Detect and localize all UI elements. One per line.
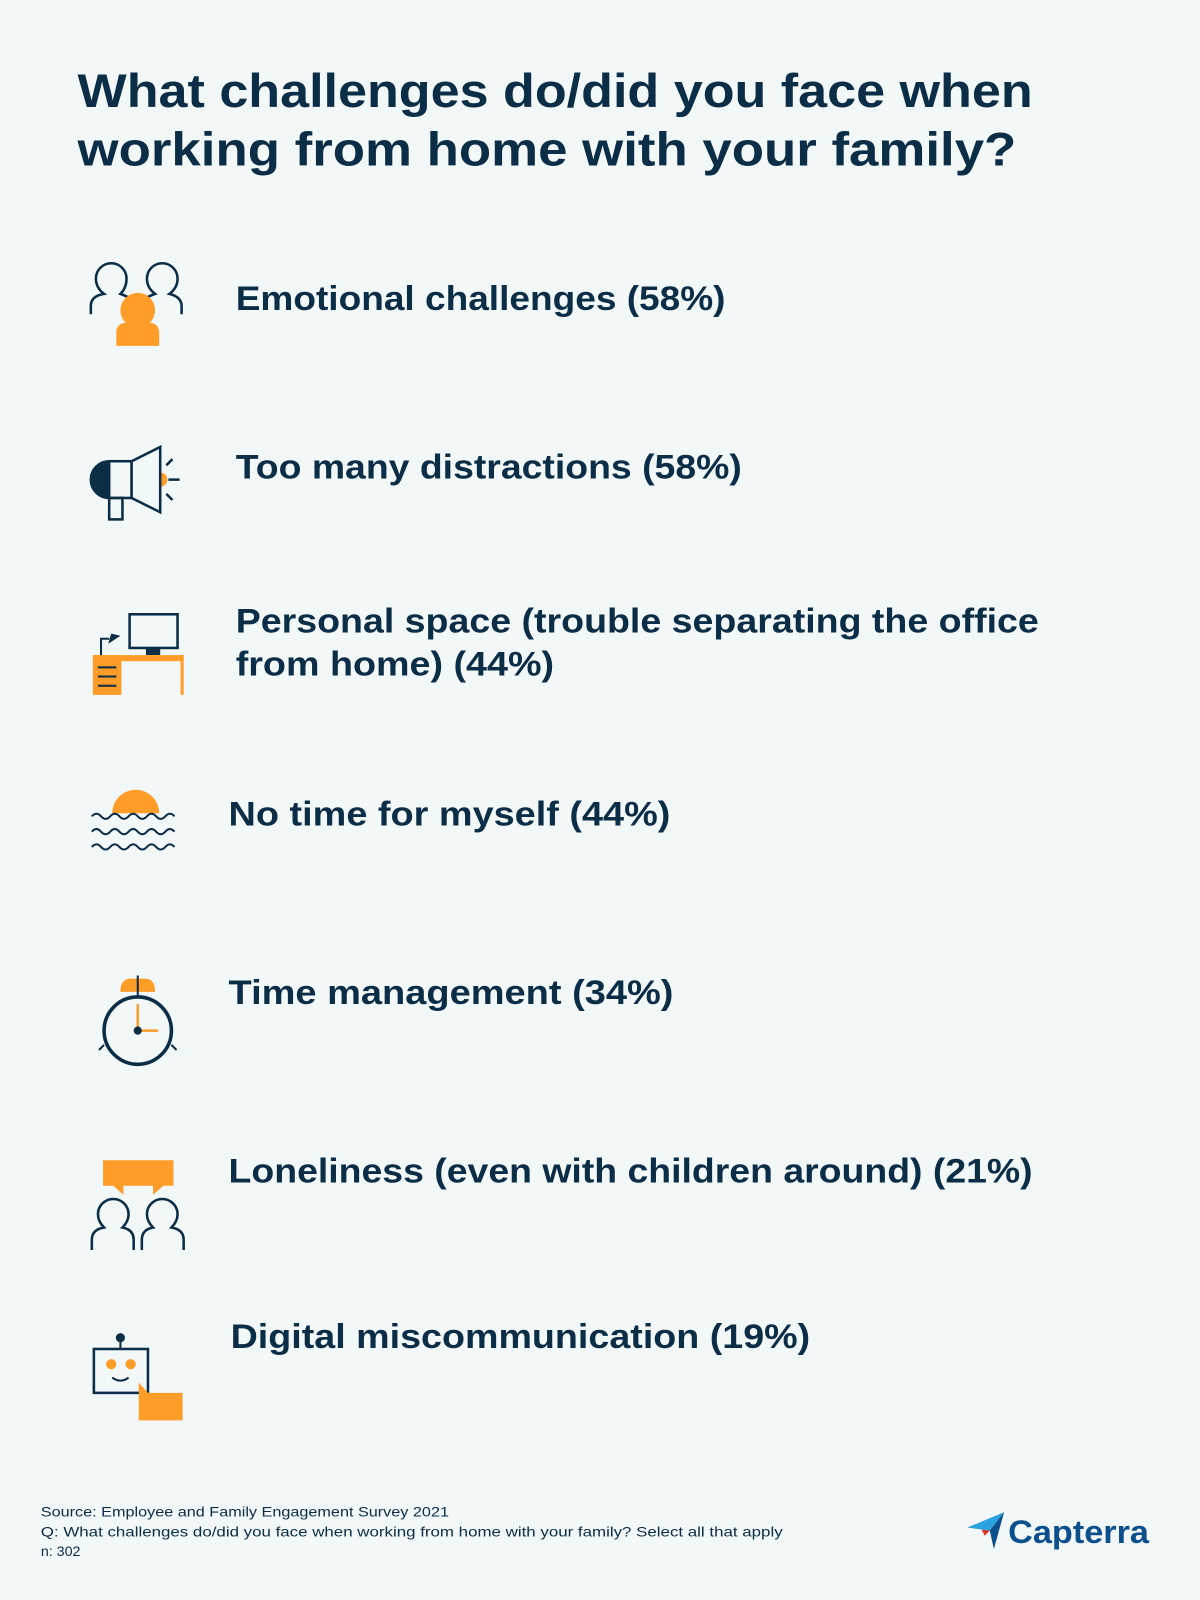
footer source xyxy=(41,1504,784,1560)
title: What challenges do/did you face when xyxy=(78,65,1033,117)
footer source: n: 302 xyxy=(41,1544,81,1560)
icon: people emotional xyxy=(91,263,182,346)
icon: loneliness xyxy=(92,1160,184,1250)
icon: desk xyxy=(93,614,184,695)
text: emotional: Emotional challenges (58%) xyxy=(236,280,726,318)
footer source: Source: Employee and Family Engagement Survey 2021 xyxy=(41,1504,449,1520)
icon: sunset xyxy=(92,790,174,849)
icon: megaphone xyxy=(91,447,180,519)
text: personal space: Personal space (trouble separating the office xyxy=(236,603,1039,641)
text: no time: No time for myself (44%) xyxy=(229,796,670,834)
title: working from home with your family? xyxy=(76,123,1016,175)
footer source: Q: What challenges do/did you face when working from home with your family? Select all that apply xyxy=(41,1525,784,1541)
text: personal space xyxy=(236,603,1039,684)
title xyxy=(76,65,1033,175)
logo: Capterra: Capterra xyxy=(1008,1513,1150,1550)
text: distractions: Too many distractions (58%) xyxy=(236,449,742,487)
text: time management: Time management (34%) xyxy=(229,974,673,1012)
text: loneliness: Loneliness (even with children around) (21%) xyxy=(229,1153,1033,1191)
icon: robot xyxy=(94,1333,183,1420)
icon: clock xyxy=(99,976,177,1064)
text: personal space: from home) (44%) xyxy=(236,646,554,684)
text: digital: Digital miscommunication (19%) xyxy=(231,1318,810,1356)
